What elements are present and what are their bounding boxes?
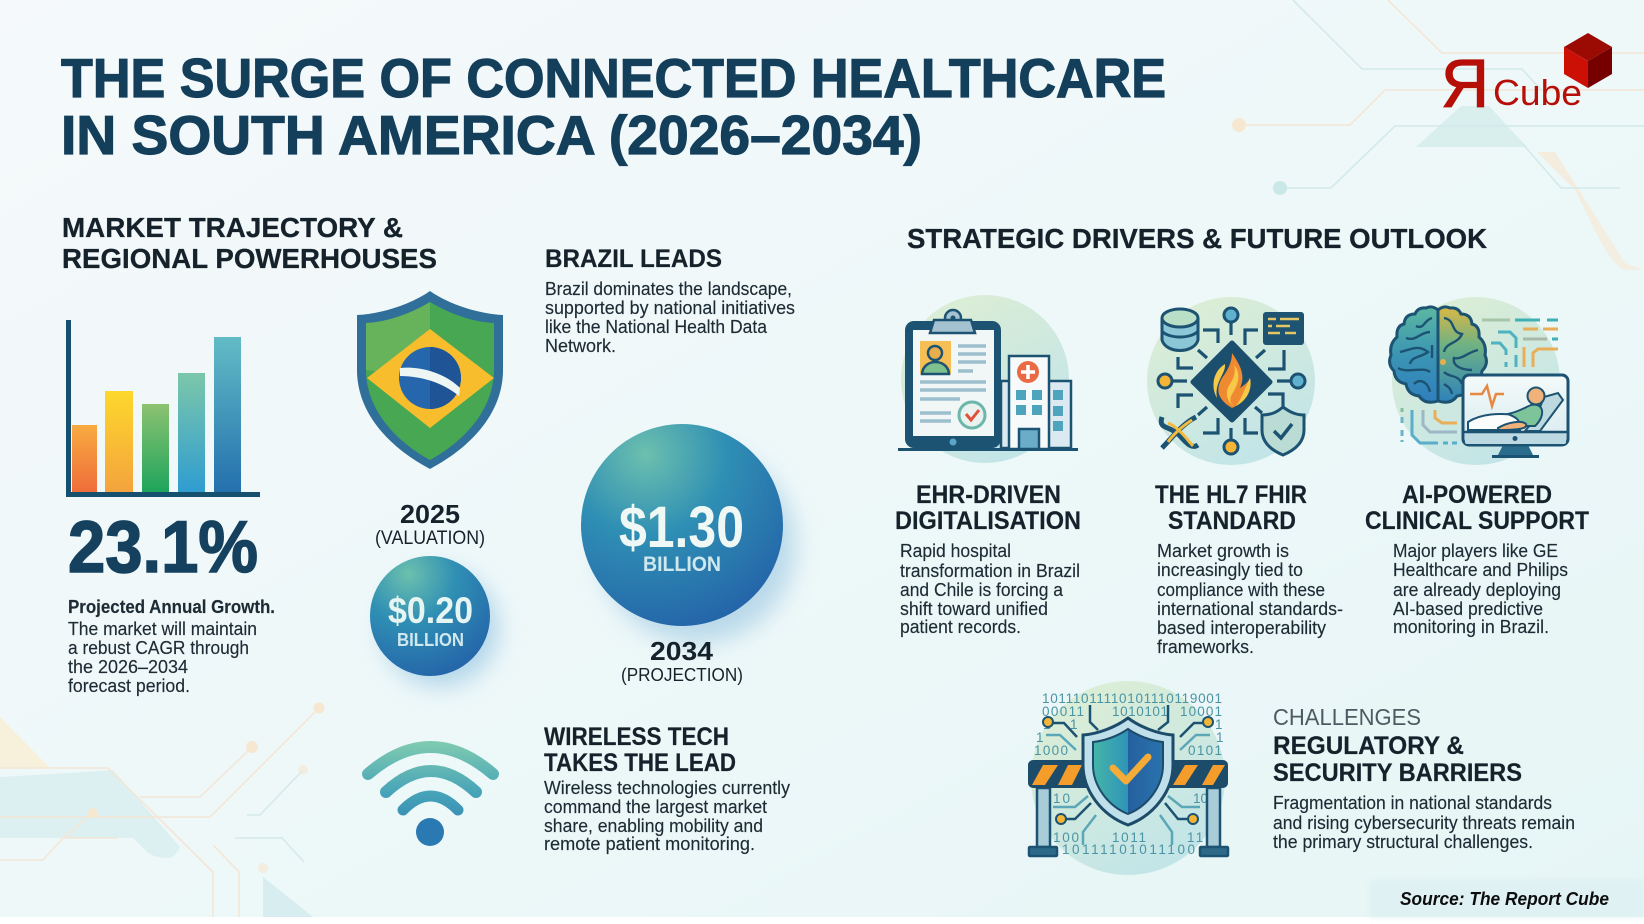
card: HL7 FHIR standard: international standards- (1157, 598, 1343, 619)
heading: market trajectory: MARKET TRAJECTORY & (62, 212, 403, 243)
text: projected annual growth: forecast period. (68, 675, 190, 696)
card: EHR-driven digitalisation: patient records. (900, 616, 1021, 637)
label: 2034 projection: (PROJECTION) (621, 664, 743, 685)
card: EHR-driven digitalisation: transformation in Brazil (900, 560, 1080, 581)
card: EHR-driven digitalisation: EHR-DRIVEN (916, 481, 1061, 509)
icon: security shield and barrier: 1000 (1034, 743, 1068, 758)
stat bubble: $0.20 billion: BILLION (397, 629, 464, 650)
card: EHR-driven digitalisation: shift toward unified (900, 598, 1048, 619)
text: challenges: CHALLENGES (1273, 704, 1421, 730)
icon: security shield and barrier: 1011 (1112, 830, 1146, 845)
text: challenges: SECURITY BARRIERS (1273, 759, 1522, 787)
card: HL7 FHIR standard: THE HL7 FHIR (1155, 481, 1307, 509)
card: HL7 FHIR standard: compliance with these (1157, 579, 1325, 600)
icon: security shield and barrier: 110 (1187, 830, 1213, 845)
card: EHR-driven digitalisation (895, 481, 1081, 637)
heading: wireless tech: TAKES THE LEAD (544, 749, 736, 777)
label: 2025 valuation: (VALUATION) (375, 528, 485, 549)
icon: security shield and barrier: 1 (1216, 730, 1224, 745)
heading: strategic drivers: STRATEGIC DRIVERS & FUTURE OUTLOOK (907, 223, 1487, 254)
text: challenges: the primary structural challenges. (1273, 831, 1533, 852)
title (61, 47, 1166, 166)
card: AI-powered clinical support: Major players like GE (1393, 540, 1558, 561)
icon: security shield and barrier: 10111011110101110119001 (1042, 691, 1222, 706)
text: challenges (1273, 704, 1575, 852)
icon: security shield and barrier: 100 (1053, 830, 1079, 845)
card: AI-powered clinical support: monitoring in Brazil. (1393, 616, 1549, 637)
stat: 23.1%: 23.1% (68, 507, 258, 588)
icon: security shield and barrier: 1 (1043, 717, 1051, 732)
icon: security shield and barrier (1028, 681, 1228, 875)
icon: security shield and barrier: 10111101011100 (1062, 842, 1195, 857)
title: IN SOUTH AMERICA (2026–2034) (61, 104, 922, 166)
card: HL7 FHIR standard: frameworks. (1157, 636, 1254, 657)
card: AI-powered clinical support: CLINICAL SUPPORT (1365, 507, 1589, 535)
card: EHR-driven digitalisation: DIGITALISATION (895, 507, 1081, 535)
source note: Source: The Report Cube (1400, 889, 1609, 909)
icon: security shield and barrier: 1 (1070, 717, 1078, 732)
heading: market trajectory: REGIONAL POWERHOUSES (62, 243, 437, 274)
text: projected annual growth: the 2026–2034 (68, 656, 188, 677)
text: wireless tech: share, enabling mobility and (544, 815, 763, 836)
heading: market trajectory (62, 212, 437, 274)
card: AI-powered clinical support: AI-based predictive (1393, 598, 1543, 619)
text: challenges: and rising cybersecurity threats remain (1273, 812, 1575, 833)
logo: RCube: Cube (1493, 72, 1582, 113)
text: Brazil leads: Brazil dominates the landscape, (545, 278, 792, 299)
card: HL7 FHIR standard (1155, 481, 1343, 657)
text: Brazil leads: supported by national initiatives (545, 297, 795, 318)
icon: security shield and barrier: 10 (1193, 791, 1208, 806)
icon: EHR clipboard and hospital (898, 295, 1078, 463)
card: AI-powered clinical support (1365, 481, 1589, 637)
logo: RCube: Я (1441, 46, 1489, 122)
card: HL7 FHIR standard: Market growth is (1157, 540, 1289, 561)
label: 2025 valuation: 2025 (400, 499, 460, 529)
stat bubble: $0.20 billion: $0.20 (388, 590, 473, 631)
heading: wireless tech (544, 723, 736, 777)
text: Brazil leads: like the National Health Data (545, 316, 768, 337)
icon: AI brain and monitor (1390, 297, 1568, 465)
text: projected annual growth: a rebust CAGR through (68, 637, 249, 658)
label: 2025 valuation (375, 499, 485, 549)
text: wireless tech: Wireless technologies currently (544, 777, 791, 798)
icon: security shield and barrier: 10 (1053, 791, 1070, 806)
text: Brazil leads (545, 278, 795, 356)
card: HL7 FHIR standard: increasingly tied to (1157, 559, 1303, 580)
icon: HL7 FHIR network (1147, 297, 1315, 465)
stat bubble: $1.30 billion: BILLION (643, 553, 721, 576)
bar chart (66, 320, 260, 497)
heading: Brazil leads: BRAZIL LEADS (545, 245, 722, 273)
text: challenges: Fragmentation in national standards (1273, 792, 1552, 813)
label: 2034 projection (621, 636, 743, 685)
icon: Brazil shield (357, 291, 503, 469)
label: 2034 projection: 2034 (650, 636, 714, 666)
text: projected annual growth (68, 596, 275, 696)
icon: security shield and barrier: 0101 (1188, 743, 1222, 758)
text: projected annual growth: The market will maintain (68, 618, 257, 639)
text: projected annual growth: Projected Annual Growth. (68, 596, 275, 617)
title: THE SURGE OF CONNECTED HEALTHCARE (61, 47, 1166, 109)
card: AI-powered clinical support: AI-POWERED (1402, 481, 1552, 509)
icon: security shield and barrier: 00011 (1042, 704, 1084, 719)
text: wireless tech: command the largest market (544, 796, 767, 817)
icon: security shield and barrier: 1 (1036, 730, 1044, 745)
card: HL7 FHIR standard: STANDARD (1168, 507, 1296, 535)
card: AI-powered clinical support: Healthcare and Philips (1393, 559, 1568, 580)
text: challenges: REGULATORY & (1273, 732, 1464, 760)
icon: security shield and barrier: 1 (1215, 717, 1223, 732)
card: EHR-driven digitalisation: and Chile is forcing a (900, 579, 1064, 600)
heading: wireless tech: WIRELESS TECH (544, 723, 729, 751)
icon: wifi (368, 747, 493, 846)
text: wireless tech (544, 777, 791, 854)
stat bubble: $1.30 billion: $1.30 (619, 495, 744, 560)
stat bubble: $0.20 billion (370, 556, 498, 686)
icon: security shield and barrier: 1010101 (1112, 704, 1168, 719)
card: HL7 FHIR standard: based interoperability (1157, 617, 1327, 638)
stat bubble: $1.30 billion (581, 424, 795, 643)
text: wireless tech: remote patient monitoring. (544, 833, 755, 854)
icon: security shield and barrier: 10001 (1180, 704, 1222, 719)
card: EHR-driven digitalisation: Rapid hospital (900, 540, 1011, 561)
card: AI-powered clinical support: are already deploying (1393, 579, 1561, 600)
text: Brazil leads: Network. (545, 335, 616, 356)
logo: RCube (1441, 33, 1612, 122)
